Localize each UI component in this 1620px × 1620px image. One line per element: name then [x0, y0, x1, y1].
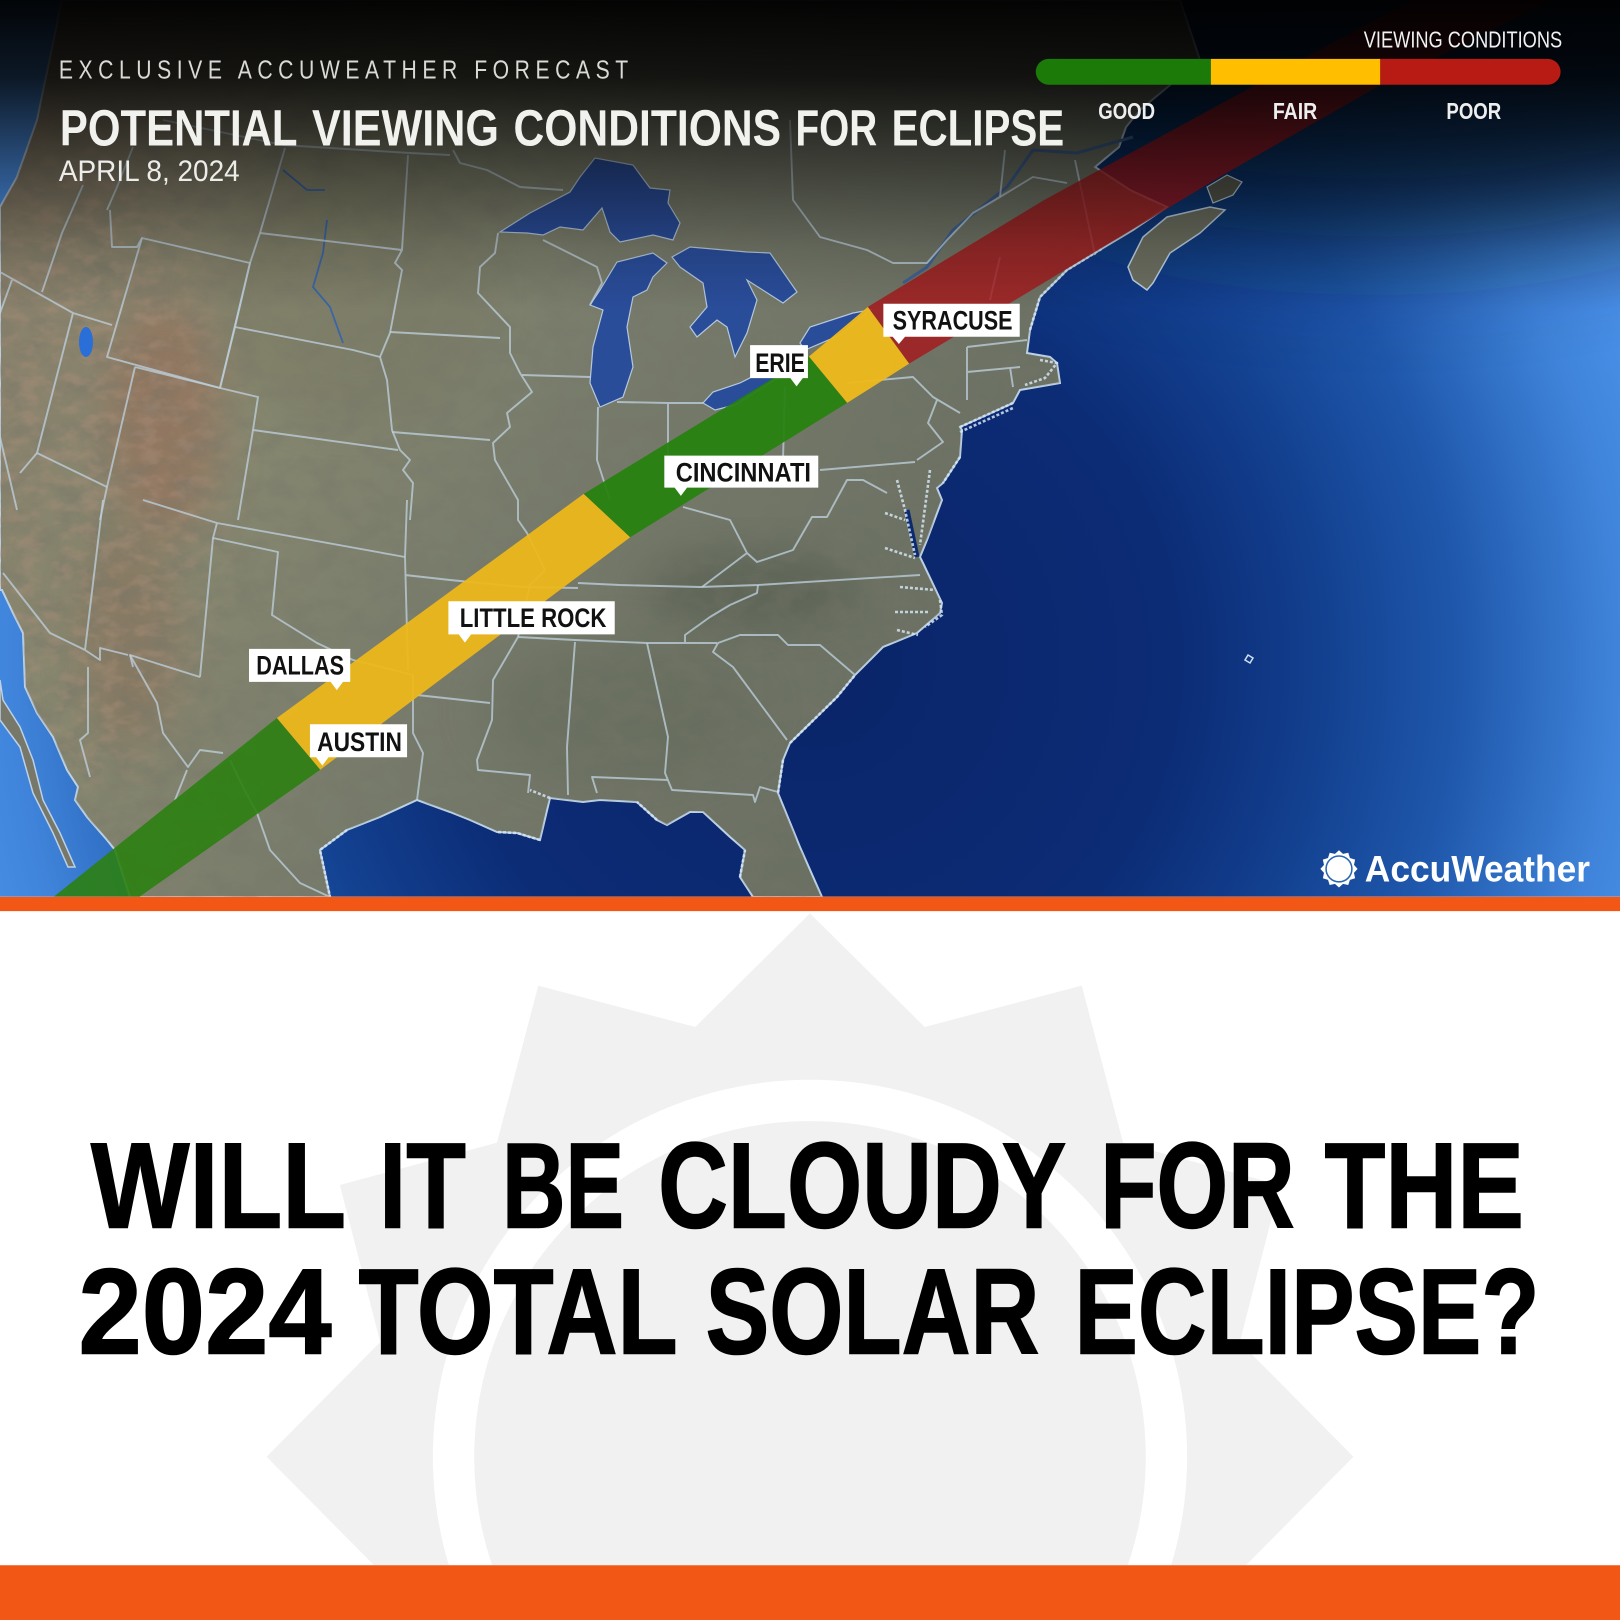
AccuWeather logo	[1320, 847, 1590, 889]
header: title: FOR	[796, 100, 877, 157]
legend label fair: FAIR	[1273, 98, 1317, 124]
header: date: APRIL 8, 2024	[59, 155, 240, 188]
headline: CLOUDY	[658, 1117, 1066, 1253]
Lake Huron	[672, 247, 797, 357]
city label: Erie	[750, 345, 808, 386]
legend label good: GOOD	[1098, 98, 1155, 124]
city label: Austin: AUSTIN	[317, 727, 402, 757]
header: title: CONDITIONS	[513, 100, 781, 157]
watermark sun	[267, 913, 1353, 1565]
path segment: good midwest	[584, 356, 847, 537]
path segment: good south	[54, 718, 320, 897]
Lake Superior	[500, 158, 680, 242]
land mass	[0, 0, 1200, 897]
great lakes	[500, 158, 870, 410]
city label: Syracuse: SYRACUSE	[893, 306, 1012, 336]
rivers	[283, 137, 1133, 557]
city label: Dallas	[249, 649, 350, 690]
wordmark: AccuWeather	[1365, 847, 1590, 889]
fractal coast detail	[320, 248, 1103, 897]
map geography, drawn in 1620 pixel space	[0, 0, 1253, 900]
headline: TOTAL	[359, 1243, 678, 1379]
legend bar good	[1036, 59, 1211, 85]
city label: Dallas: DALLAS	[256, 651, 344, 681]
city label: Cincinnati: CINCINNATI	[676, 457, 811, 487]
legend bar fair	[1211, 59, 1380, 85]
orange divider bar	[0, 897, 1620, 911]
panel background	[0, 911, 1620, 1565]
Baja California	[0, 680, 75, 867]
legend: viewing conditions	[1036, 27, 1562, 124]
headline: BE	[502, 1117, 624, 1253]
Lake Michigan	[590, 253, 667, 407]
icon: sun	[1320, 850, 1358, 887]
headline: 2024	[79, 1243, 332, 1379]
header: title: POTENTIAL	[60, 100, 298, 157]
state and province borders	[0, 120, 1095, 897]
Cape Breton	[1207, 175, 1242, 203]
city label: Cincinnati	[664, 456, 818, 496]
ocean	[0, 0, 1620, 897]
legend bar poor	[1380, 59, 1561, 85]
top darkening	[0, 0, 1620, 310]
city label: Austin	[310, 724, 407, 766]
small island	[1245, 655, 1253, 663]
Lake Ontario	[800, 310, 870, 350]
city label: Little Rock: LITTLE ROCK	[460, 603, 607, 633]
legend title: VIEWING CONDITIONS	[1364, 27, 1562, 53]
path segment: poor	[868, 22, 1506, 364]
header: title	[60, 100, 1064, 157]
header: title: VIEWING	[312, 100, 499, 157]
headline: THE	[1325, 1117, 1524, 1253]
Nova Scotia	[1128, 207, 1225, 290]
headline: WILL	[91, 1117, 346, 1253]
Lake Erie	[702, 377, 774, 411]
city label: Little Rock	[448, 601, 615, 643]
terrain texture	[0, 120, 1254, 897]
Great Salt Lake	[79, 327, 93, 357]
header: title: ECLIPSE	[892, 100, 1064, 157]
legend label poor: POOR	[1446, 98, 1501, 124]
headline: SOLAR	[706, 1243, 1039, 1379]
headline: FOR	[1100, 1117, 1295, 1253]
lower panel	[0, 911, 1620, 1565]
eclipse path of totality	[54, 0, 1553, 897]
headline: IT	[379, 1117, 466, 1253]
ocean top-right shading	[930, 0, 1620, 238]
path segment: fair	[277, 494, 630, 770]
bottom orange bar	[0, 1565, 1620, 1620]
headline	[79, 1117, 1539, 1379]
city label: Syracuse	[883, 304, 1020, 344]
city label: Erie: ERIE	[755, 348, 805, 378]
path segment: fair east	[809, 307, 909, 403]
map panel	[0, 0, 1620, 900]
header: kicker: EXCLUSIVE ACCUWEATHER FORECAST	[59, 57, 628, 85]
